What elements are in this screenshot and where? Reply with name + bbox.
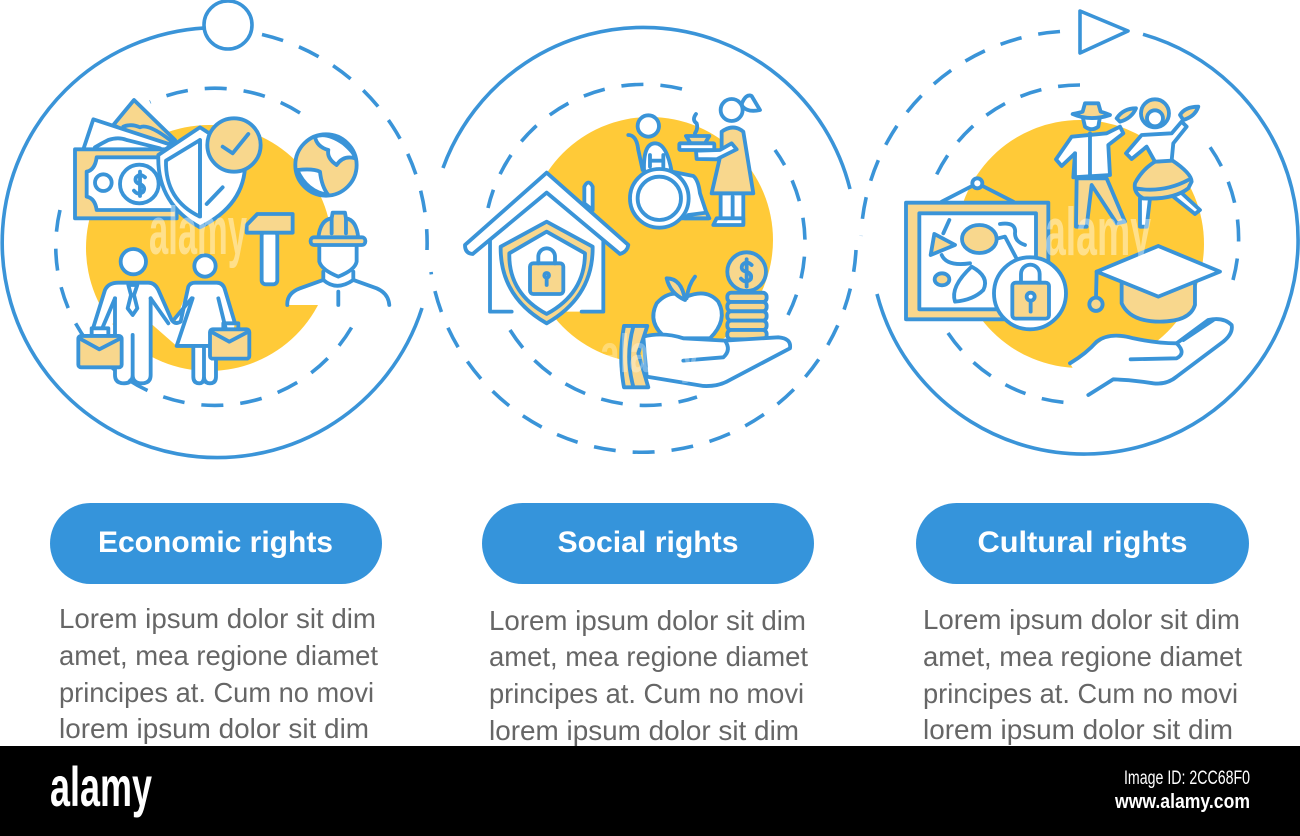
- text block: social: [489, 605, 808, 746]
- icon: worker: [287, 213, 389, 305]
- footer band: [0, 746, 1300, 836]
- icon: apple: [653, 277, 722, 338]
- text block: economic: Lorem ipsum dolor sit dim: [59, 603, 376, 634]
- text block: economic: lorem ipsum dolor sit dim: [59, 713, 369, 744]
- icons: painting, lock, dancers, cap, hand: [906, 99, 1232, 395]
- label pill: economic rights: [50, 503, 382, 584]
- icon: shield with check: [158, 118, 261, 227]
- text block: social: lorem ipsum dolor sit dim: [489, 715, 799, 746]
- watermark: alamy: [1045, 194, 1151, 270]
- label pill: social rights: Social rights: [558, 526, 738, 559]
- text block: economic: [59, 603, 378, 744]
- icon: house with shield: [465, 173, 628, 323]
- icon: carer with tray: [679, 95, 760, 225]
- watermark: alamy: [149, 193, 247, 269]
- icon: business man and woman: [78, 249, 249, 383]
- text block: economic: principes at. Cum no movi: [59, 677, 374, 708]
- text block: cultural: [923, 604, 1242, 745]
- text block: social: Lorem ipsum dolor sit dim: [489, 605, 806, 636]
- yellow disc: cultural: [956, 120, 1204, 368]
- text block: social: principes at. Cum no movi: [489, 678, 804, 709]
- label pill: social rights: [482, 503, 814, 584]
- icon: open hand with cuff: [621, 326, 790, 387]
- icon: banknotes: [75, 100, 177, 218]
- icon: dancing woman: [1126, 99, 1200, 227]
- icon: globe: [295, 134, 357, 196]
- icon: graduation cap: [1089, 246, 1220, 322]
- icon: dancing man: [1056, 103, 1136, 227]
- icon: open hand: [1070, 319, 1232, 395]
- watermark: alamy: [600, 324, 700, 384]
- panel: cultural rights: [861, 11, 1298, 454]
- label pill: economic rights: Economic rights: [98, 526, 333, 559]
- footer image id: Image ID: 2CC68F0: [1124, 768, 1250, 789]
- panel: social rights: [431, 27, 856, 452]
- panel: economic rights: [2, 1, 427, 458]
- text block: cultural: lorem ipsum dolor sit dim: [923, 714, 1233, 745]
- text block: cultural: Lorem ipsum dolor sit dim: [923, 604, 1240, 635]
- text block: social: amet, mea regione diamet: [489, 641, 808, 672]
- footer url: www.alamy.com: [1114, 791, 1250, 813]
- outer ring: cultural: [861, 32, 1298, 454]
- icon: framed painting with lock: [906, 178, 1066, 329]
- text block: cultural: principes at. Cum no movi: [923, 678, 1238, 709]
- icon: coins: [727, 252, 767, 353]
- outer ring: social: [431, 27, 856, 452]
- icon: person in wheelchair: [628, 115, 709, 228]
- circle marker: [204, 1, 252, 49]
- label pill: cultural rights: Cultural rights: [978, 526, 1188, 559]
- icons: money, shield, globe, hammer, worker, business people: [75, 100, 389, 383]
- icon: hammer: [247, 214, 293, 284]
- yellow disc: economic: [86, 125, 332, 371]
- yellow disc: social: [527, 117, 773, 363]
- text block: economic: amet, mea regione diamet: [59, 640, 378, 671]
- text block: cultural: amet, mea regione diamet: [923, 641, 1242, 672]
- icons: house, wheelchair, carer, apple, coins, hand: [465, 95, 790, 387]
- footer logo: alamy: [50, 755, 152, 818]
- triangle marker: [1080, 11, 1128, 53]
- label pill: cultural rights: [916, 503, 1249, 584]
- outer ring: economic: [2, 28, 427, 458]
